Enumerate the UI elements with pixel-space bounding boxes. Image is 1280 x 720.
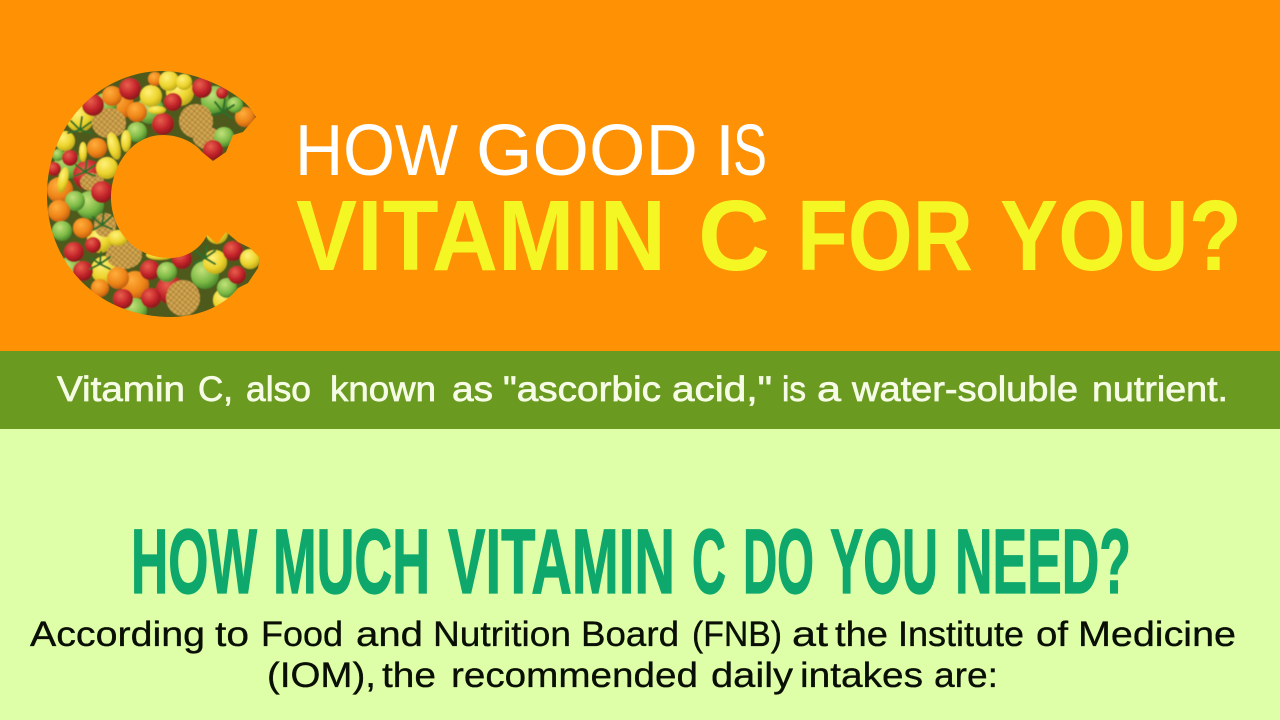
title: how good is: HOW <box>295 111 458 191</box>
text: strip definition: nutrient. <box>1092 370 1228 409</box>
title: how good is: I <box>715 111 735 191</box>
title: how good is <box>295 111 767 191</box>
text block: recommended intakes: at <box>792 615 828 654</box>
heading: how much vitamin c do you need: NEED? <box>955 511 1131 613</box>
text: strip definition: known <box>330 370 436 409</box>
icon: letter C made of fruit <box>40 65 265 322</box>
panel: green strip <box>0 351 1280 429</box>
text block: recommended intakes: (IOM), <box>267 656 376 695</box>
title: vitamin c for you: C <box>698 180 770 292</box>
heading: how much vitamin c do you need: YOU <box>830 511 938 613</box>
panel: pale green section <box>0 429 1280 720</box>
text block: recommended intakes: recommended <box>451 656 698 695</box>
heading: how much vitamin c do you need: HOW <box>131 511 257 613</box>
title: how good is: S <box>733 111 767 191</box>
text block: recommended intakes: According <box>30 615 205 654</box>
panel: orange header <box>0 0 1280 351</box>
text block: recommended intakes <box>30 615 1236 695</box>
title: vitamin c for you: YOU? <box>1000 180 1242 292</box>
heading: how much vitamin c do you need: C <box>692 511 726 613</box>
text block: recommended intakes: intakes <box>800 656 923 695</box>
title: vitamin c for you: FOR <box>797 180 973 292</box>
text: strip definition: Vitamin <box>57 370 185 409</box>
title: how good is: GOOD <box>476 111 698 191</box>
text block: recommended intakes: Food <box>261 615 343 654</box>
title: vitamin c for you: VITAMIN <box>296 180 666 292</box>
text block: recommended intakes: and <box>356 615 423 654</box>
heading: how much vitamin c do you need: DO <box>743 511 814 613</box>
text: strip definition: C, <box>198 370 233 409</box>
title: vitamin c for you <box>296 180 1242 292</box>
text block: recommended intakes: Institute <box>898 615 1024 654</box>
text: strip definition: also <box>246 370 311 409</box>
heading: how much vitamin c do you need <box>131 511 1131 613</box>
text block: recommended intakes: to <box>215 615 249 654</box>
heading: how much vitamin c do you need: MUCH <box>273 511 430 613</box>
text: strip definition <box>57 370 1228 409</box>
text block: recommended intakes: Medicine <box>1078 615 1236 654</box>
text block: recommended intakes: are: <box>934 656 998 695</box>
heading: how much vitamin c do you need: VITAMIN <box>448 511 675 613</box>
text block: recommended intakes: of <box>1036 615 1068 654</box>
text block: recommended intakes: Nutrition <box>433 615 571 654</box>
text block: recommended intakes: daily <box>711 656 794 695</box>
text: strip definition: water-soluble <box>851 370 1078 409</box>
text: strip definition: is <box>782 370 806 409</box>
text block: recommended intakes: the <box>835 615 888 654</box>
text: strip definition: as <box>452 370 493 409</box>
text block: recommended intakes: (FNB) <box>692 615 782 654</box>
text block: recommended intakes: the <box>382 656 436 695</box>
text: strip definition: a <box>817 370 842 409</box>
text: strip definition: "ascorbic <box>503 370 661 409</box>
text: strip definition: acid," <box>672 370 772 409</box>
text block: recommended intakes: Board <box>581 615 679 654</box>
